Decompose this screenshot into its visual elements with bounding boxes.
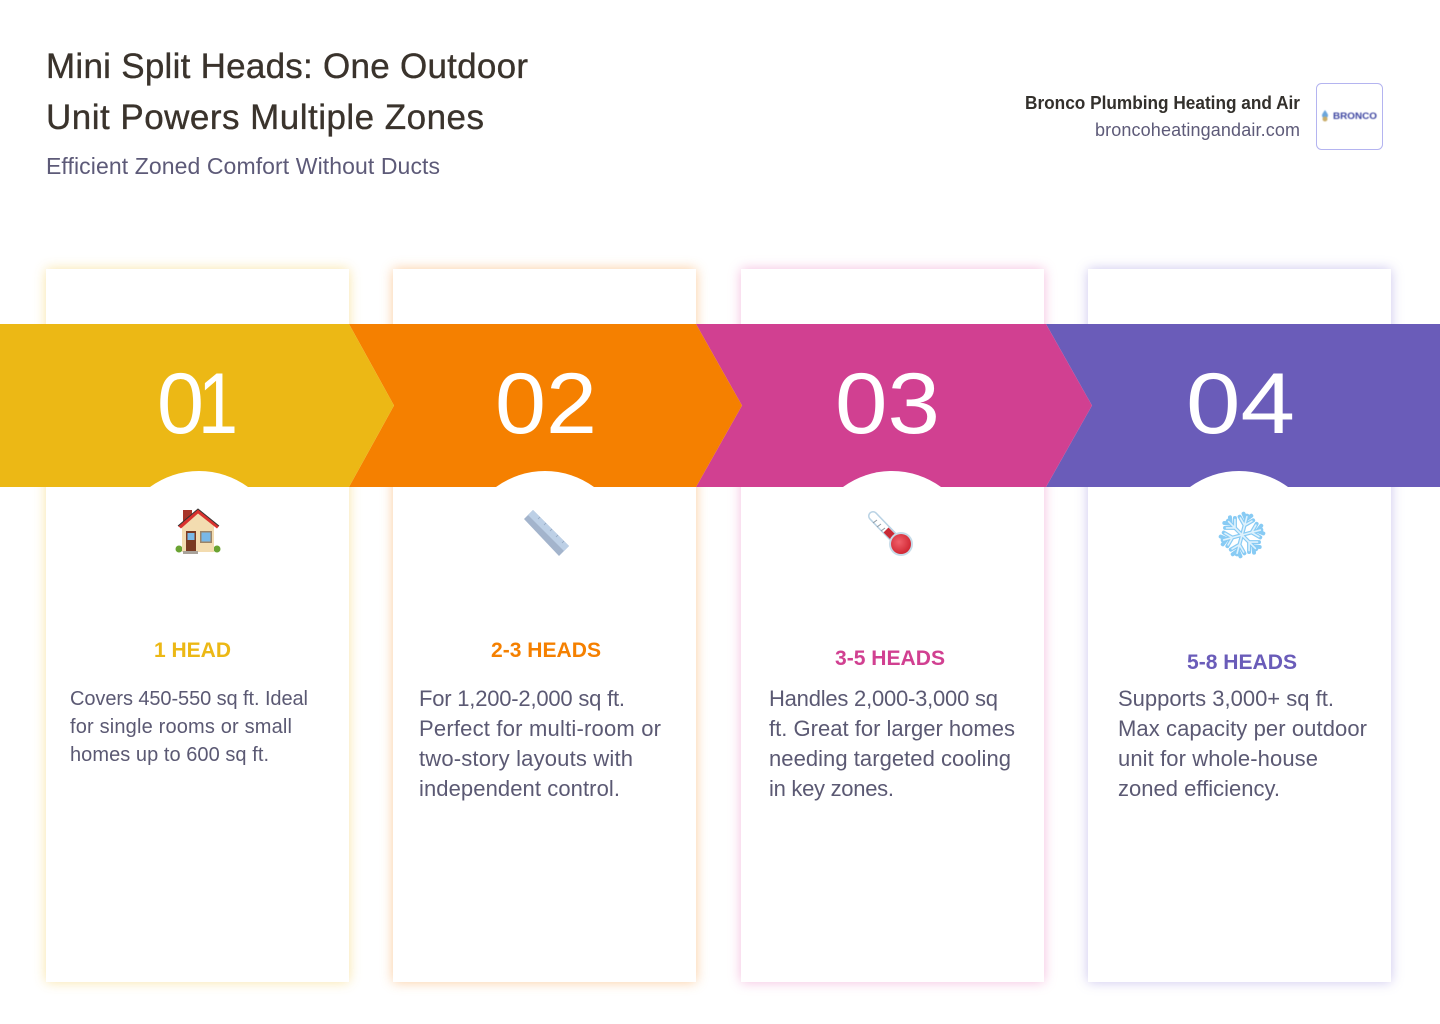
text block: card 2: For 1,200-2,000 sq ft. [419,686,625,711]
title: Mini Split Heads: One Outdoor [46,47,528,86]
text block: card 4: zoned efficiency. [1118,776,1280,801]
text block: card 1: homes up to 600 sq ft. [70,744,269,766]
heading: 5-8 heads: 5-8 HEADS [1187,651,1297,674]
text block: card 4 [1118,686,1367,801]
icon: thermometer [873,516,913,556]
text block: card 2: two-story layouts with [419,746,633,771]
title: Unit Powers Multiple Zones [46,98,484,137]
panel: card 2 background [393,269,696,982]
number 01: 1 [198,356,238,452]
brand website: broncoheatingandair.com [1095,120,1300,140]
heading: 1 head: 1 HEAD [154,639,231,662]
number 04: 04 [1186,356,1295,452]
text block: card 4: Supports 3,000+ sq ft. [1118,686,1334,711]
brand name: Bronco Plumbing Heating and Air [1025,93,1300,113]
number 01: 0 [157,356,204,452]
text block: card 4: unit for whole-house [1118,746,1318,771]
subtitle: Efficient Zoned Comfort Without Ducts [46,153,440,179]
icon: ruler [524,510,569,556]
text block: card 1: Covers 450-550 sq ft. Ideal [70,688,308,710]
logo: BRONCO [1333,111,1377,121]
icon notch: card 1 [150,471,248,487]
icon: snowflake [1216,509,1268,561]
logo [1316,84,1382,150]
text block: card 3: needing targeted cooling [769,746,1011,771]
icon: house [176,509,220,554]
number 03: 03 [835,356,940,452]
text block: card 2 [419,686,661,801]
arrow band: step 1 [0,324,394,487]
text block: card 3: in key zones. [769,776,894,801]
title [46,47,528,137]
number 01 [157,356,238,452]
text block: card 1 [70,688,308,766]
panel: card 1 background [46,269,349,982]
panel: card 3 background [741,269,1044,982]
text block: card 1: for single rooms or small [70,716,292,738]
arrow band: step 2 [349,324,742,487]
text block: card 3 [769,686,1015,801]
panel: card 4 background [1088,269,1391,982]
text block: card 2: independent control. [419,776,620,801]
icon notch: card 2 [496,471,594,487]
arrow band: step 4 [1046,324,1440,487]
text block: card 3: ft. Great for larger homes [769,716,1015,741]
arrow band: step 3 [696,324,1092,487]
text block: card 4: Max capacity per outdoor [1118,716,1367,741]
text block: card 2: Perfect for multi-room or [419,716,661,741]
heading: 3-5 heads: 3-5 HEADS [835,647,945,670]
text block: card 3: Handles 2,000-3,000 sq [769,686,998,711]
heading: 2-3 heads: 2-3 HEADS [491,639,601,662]
icon notch: card 3 [843,471,941,487]
number 02: 02 [495,356,597,452]
icon notch: card 4 [1190,471,1288,487]
